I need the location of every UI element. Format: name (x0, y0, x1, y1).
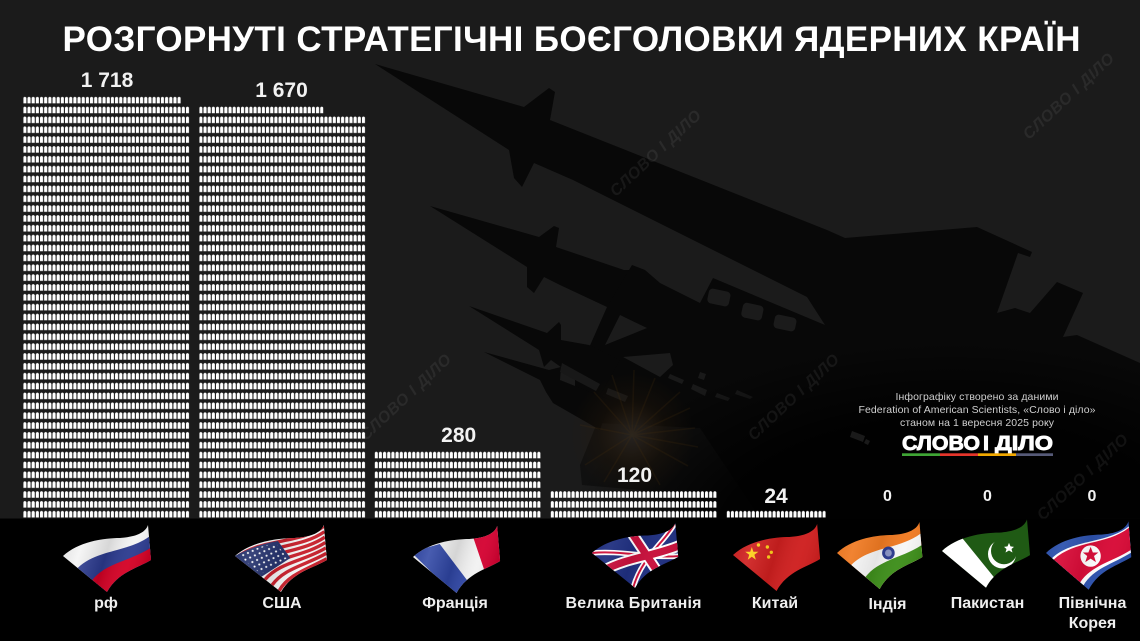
country labels: Індія (868, 596, 907, 613)
watermarks: СЛОВО І ДІЛО (1020, 50, 1118, 143)
bar: uk warheads (551, 490, 717, 518)
bar: russia warheads (23, 97, 189, 518)
title: РОЗГОРНУТІ СТРАТЕГІЧНІ БОЄГОЛОВКИ ЯДЕРНИХ КРАЇН (62, 20, 1080, 59)
country labels: Північна (1059, 595, 1126, 612)
flag: china (733, 524, 820, 591)
watermarks: СЛОВО І ДІЛО (607, 107, 705, 200)
flag: pakistan (942, 520, 1030, 588)
background marks near credits (850, 431, 870, 445)
flag: india (837, 522, 922, 589)
credits text: Інфографіку створено за даними (896, 391, 1059, 403)
flag: north korea (1046, 522, 1132, 590)
credits text: Federation of American Scientists, «Слово і діло» (858, 404, 1096, 416)
bar: france warheads (375, 451, 541, 518)
logo: slovo i dilo: І (983, 432, 989, 455)
value: usa: 1 670 (255, 79, 308, 102)
value: pakistan: 0 (983, 488, 992, 505)
flag: united kingdom (592, 523, 678, 588)
value: france: 280 (441, 424, 476, 447)
sun glow behind missiles (570, 370, 698, 497)
flag: france (413, 526, 500, 593)
value: russia: 1 718 (81, 69, 134, 92)
country labels: США (262, 595, 302, 612)
value: china: 24 (764, 485, 788, 508)
watermarks: СЛОВО І ДІЛО (745, 351, 843, 444)
logo: slovo i dilo: ДІЛО (995, 432, 1053, 455)
credits text: станом на 1 вересня 2025 року (900, 417, 1055, 429)
country labels: Франція (422, 595, 488, 612)
country labels: Китай (752, 595, 798, 612)
credits text (858, 391, 1096, 429)
country labels: рф (94, 595, 118, 612)
country labels: Корея (1069, 615, 1116, 632)
flag: usa (235, 525, 327, 592)
bar: usa warheads (199, 107, 365, 518)
country labels: Велика Британія (566, 595, 702, 612)
watermarks: СЛОВО І ДІЛО (1034, 431, 1132, 524)
country labels (94, 595, 1126, 632)
bottom band (0, 518, 1140, 641)
logo: slovo i dilo: СЛОВО (902, 432, 980, 455)
value: uk: 120 (617, 464, 652, 487)
watermarks (357, 50, 1132, 524)
missile silhouette illustration (375, 64, 1140, 518)
watermarks: СЛОВО І ДІЛО (357, 351, 455, 444)
logo: slovo i dilo (902, 432, 1053, 456)
flag: russia (63, 525, 151, 592)
lower right darkening (565, 340, 1140, 519)
value: north korea: 0 (1088, 488, 1097, 505)
bar: china warheads (727, 510, 826, 518)
value: india: 0 (883, 488, 892, 505)
country labels: Пакистан (951, 595, 1024, 612)
